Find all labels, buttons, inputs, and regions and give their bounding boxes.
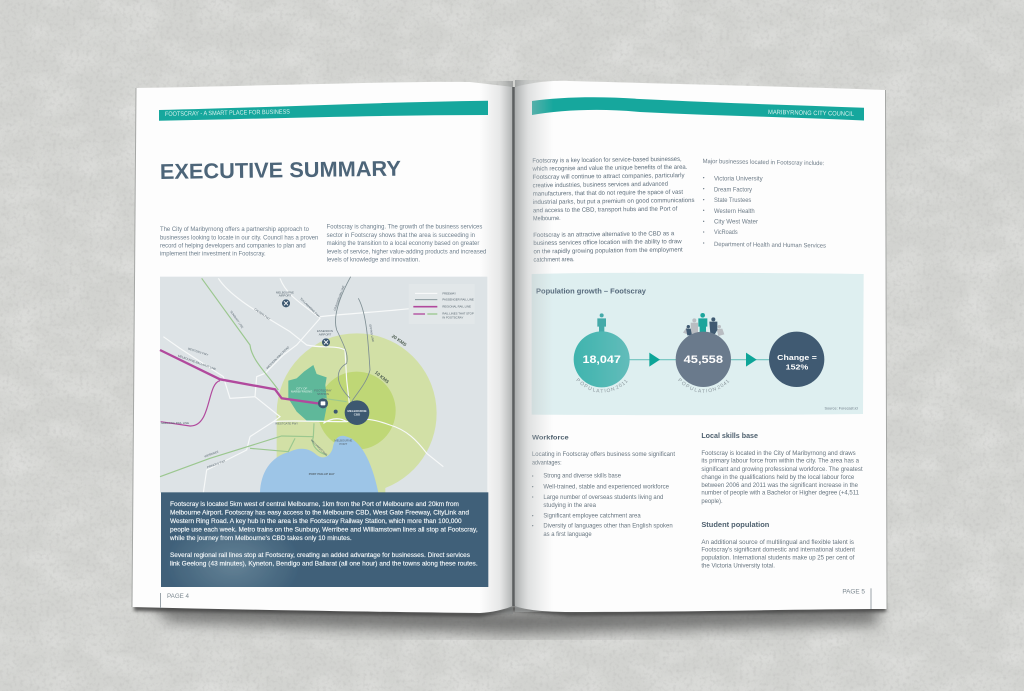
map: place labels: ESSENDON [317,329,333,333]
source note: Source: Forecast.id [824,407,858,411]
circle: population 2011 [574,331,630,387]
map: Footscray location [160,277,487,493]
panel: right page [515,80,887,612]
circle: population 2041: 45,558 [684,354,723,366]
major businesses list: Major businesses located in Footscray include: [703,158,825,167]
map: legend: IN FOOTSCRAY [442,315,463,319]
panel: population growth infographic [532,273,864,415]
label: population 2011: N [610,386,616,393]
intro text columns: implement their investment in Footscray. [160,251,266,258]
workforce section: Significant employee catchment area [543,513,641,520]
label: population 2041: 0 [720,382,725,389]
major businesses list: State Trustees [714,197,751,204]
intro text column: industrial parks, but put a premium on good communications [533,197,695,206]
label: population 2011: O [606,388,611,394]
callout: Footscray location text box: people use each week. Metro trains on the Sunbury, Werribee and Williamstown lines all stop at Footscray, [170,526,478,533]
student population section: population. International students make up 25 per cent of [701,554,855,561]
local skills base section: Footscray is located in the City of Maribyrnong and draws [701,450,856,457]
left header band: FOOTSCRAY - A SMART PLACE FOR BUSINESS [165,109,290,118]
intro text column: manufacturers, that that do not require the space of vast [533,189,683,198]
workforce section: Large number of overseas students living and [543,494,664,501]
intro text column: and access to the CBD, transport hubs and the Port of [533,206,678,214]
local skills base section [701,433,863,505]
callout: Footscray location text box: link Geelong (43 minutes), Kyneton, Bendigo and Ballarat (all one hour) and the towns along these routes. [170,560,478,567]
map: green lines [160,278,347,477]
local skills base section: Local skills base [701,433,758,440]
intro text column: business services office location with the ability to draw [533,238,682,247]
panel: left page [132,81,513,614]
workforce section: studying in the area [543,502,597,509]
label: population 2011: 0 [618,382,624,389]
student population section: the Victoria University total. [701,562,775,569]
page shadows [134,604,886,634]
major businesses list: Victoria University [714,175,764,182]
label: population 2041: P [684,383,691,390]
student population section: Student population [701,522,769,529]
map: 20km radius [277,333,437,493]
intro text columns: Footscray is changing. The growth of the business services [327,224,482,231]
map: Melbourne CBD marker: CBD [354,413,361,417]
left header band [159,101,488,121]
major businesses list: City West Water [714,219,758,226]
student population section [701,522,855,569]
label: population 2011: O [578,380,585,388]
label: population 2041: N [712,386,718,393]
workforce section: Locating in Footscray offers business some significant [532,451,675,458]
map: radius labels [374,334,408,385]
map: legend: FREEWAY [442,291,456,295]
label: population 2041: O [708,388,713,394]
label: population 2011 [575,377,630,395]
intro text column: catchment area. [533,256,575,264]
callout: Footscray location text box: Several regional rail lines stop at Footscray, creating an added advantage for businesses. Direct services [170,552,471,559]
page number: page 5 [842,588,871,609]
intro text columns: making the transition to a local economy based on greater [327,240,479,247]
map: place labels: CALDER FWY [253,307,271,321]
student population section: An additional source of multilingual and flexible talent is [701,539,854,546]
spine: dark gutter between pages [512,87,515,606]
map: radius labels: 20 KMS [391,334,408,347]
local skills base section: its primary labour force from within the city. The area has a [701,458,860,465]
label: population 2041: U [689,386,694,393]
right header band: MARIBYRNONG CITY COUNCIL [768,109,855,118]
callout: Footscray location text box: Western Ring Road. A key hub in the area is the Footscray Railway Station, which more than 100,000 [170,518,462,525]
map: Melbourne CBD marker: MELBOURNE [347,409,367,413]
label: population 2011: 1 [621,381,627,387]
callout: Footscray location text box: while the journey from Melbourne's CBD takes only 10 minutes. [169,535,352,542]
map: place labels: MARIBYRNONG [291,390,312,394]
icon: single person [597,313,606,333]
map: legend: REGIONAL RAIL LINE [442,305,471,309]
map: place labels: TULLAMARINE FWY [299,297,321,319]
label: population 2011: A [596,388,600,394]
map: City of Maribyrnong area [288,365,327,421]
connector lines and arrows [628,353,770,367]
map: place labels: STATION [317,392,329,396]
intro text column: Footscray will continue to attract companies, particularly [532,172,685,181]
icon: group of people [683,313,724,336]
map: Footscray station icon [318,398,328,408]
workforce section: Strong and diverse skills base [543,473,622,480]
major businesses list [703,158,826,250]
circle: change: Change = [777,353,817,362]
callout: Footscray location text box [161,492,488,587]
intro text column: which recognise and value the unique benefits of the area. [531,164,688,173]
intro text columns: record of helping developers and companies to plan and [160,242,306,249]
label: population 2041: T [702,389,705,395]
workforce section: Workforce [532,435,569,442]
map: place labels: MELBOURNE [334,439,352,443]
callout: Footscray location text box: Footscray is located 5km west of central Melbourne, 1km from the Port of Melbourne and 20km from [170,501,459,508]
local skills base section: change in the qualifications held by the local labour force [701,474,855,481]
student population section: Footscray's significant domestic and international student [701,547,855,554]
local skills base section: number of people with a Bachelor or Higher degree (+4,511 [701,490,860,497]
intro text columns: The City of Maribyrnong offers a partnership approach to [160,226,310,233]
page number: page 5: PAGE 5 [842,588,865,595]
map: place labels: FOOTSCRAY [314,389,332,393]
intro text column [531,156,695,264]
intro text columns: levels of knowledge and innovation. [327,257,420,264]
label: population 2041: 4 [722,381,728,387]
map: place labels: MELBOURNE [276,290,294,294]
label: population 2011: L [592,387,596,394]
map: place labels: PORT [339,442,348,446]
map: place labels: AIRPORT [279,294,292,298]
intro text column: Footscray is an attractive alternative to the CBD as a [533,230,675,239]
intro text column: Footscray is a key location for service-based businesses, [532,156,682,165]
workforce section [532,435,675,538]
map: place labels: AIRPORT [319,332,332,336]
label: population 2041: P [676,377,683,385]
label: population 2011: U [587,386,593,393]
map: place labels: CITY OF [296,386,307,390]
major businesses list: VicRoads [714,229,738,236]
circle: change [769,332,824,387]
intro text columns: businesses looking to locate in our city. Council has a proven [160,234,319,241]
label: population 2041: O [680,380,687,388]
label: population 2011: 2 [615,384,620,391]
workforce section: as a first language [543,531,592,538]
label: population 2041: L [694,387,698,394]
map: Port Phillip Bay [260,436,378,493]
map: place labels: WESTERN FWY [187,347,209,357]
map: airport icons [282,299,338,414]
title: EXECUTIVE SUMMARY [160,157,401,184]
label: population 2011: 1 [623,378,630,385]
map: place labels: GEELONG RAIL LINE [161,421,189,425]
label: population 2041 [676,377,731,395]
map: legend: PASSENGER RAIL LINE [442,298,474,302]
intro text column: Melbourne. [533,215,561,222]
label: population 2011: P [583,383,589,390]
map: place labels: PORT PHILLIP BAY [309,472,335,476]
intro text columns [160,224,487,264]
workforce section: advantages: [532,459,562,466]
map: place labels: MELBOURNE-BALLARAT LINE [177,354,217,371]
map: freeways [163,278,443,493]
map: place labels: WILLIAMSTOWN [310,438,328,457]
map: place labels: WERRIBEE [204,450,219,459]
map: place labels: SUNBURY LINE [229,310,244,329]
map: suburban rail lines [335,277,370,402]
page number: page 4 [160,593,189,608]
page number: page 4: PAGE 4 [167,593,189,600]
map: regional rail lines [160,350,320,426]
map: place labels: WESTGATE FWY [275,421,298,425]
local skills base section: people). [701,498,723,505]
major businesses list: Dream Factory [714,186,753,193]
map: 10km radius [318,372,396,450]
label: population 2041: 2 [717,384,722,391]
label: population 2041: A [698,388,702,394]
right header band [532,97,864,120]
label: population 2011: P [575,377,582,385]
label: population 2011: T [600,389,604,395]
map: place labels [161,285,375,476]
intro text columns: sector in Footscray shows that the area is succeeding in [327,232,476,239]
map: place labels: EPPING LINE [368,324,375,342]
label: population 2041: 1 [725,378,731,385]
intro text columns: levels of service, higher value-adding products and increased [327,248,487,255]
label: population 2041: I [706,388,708,394]
map: Melbourne CBD marker [345,400,369,425]
chart heading: Population growth – Footscray [536,288,646,295]
workforce section: Well-trained, stable and experienced workforce [543,483,670,490]
label: population 2011: I [604,388,606,394]
local skills base section: significant and growing professional workforce. The greatest [701,466,863,473]
map: legend [409,284,475,324]
major businesses list: Western Health [714,208,755,215]
callout: Footscray location text box: Melbourne Airport. Footscray has easy access to the Melbourne CBD, West Gate Freeway, CityLink and [170,510,469,517]
lower text columns [532,433,871,609]
circle: population 2011: 18,047 [582,354,621,366]
local skills base section: between 2006 and 2011 was the significant increase in the [701,482,859,489]
major businesses list: Department of Health and Human Services [714,241,826,250]
workforce section: Diversity of languages other than English spoken [543,523,673,530]
circle: population 2041 [676,332,731,387]
map: place labels: CRAIGIEBURN LINE [333,285,346,311]
intro text column: on the rapidly growing population from the employment [533,246,683,255]
circle: change: 152% [786,362,809,371]
intro text column: creative industries, business services and advanced [533,181,669,189]
map: place labels: WESTERN RING ROAD [265,345,290,370]
map: legend: RAIL LINES THAT STOP [442,312,474,316]
map: radius labels: 10 KMS [374,370,390,385]
map: place labels: PRINCES FWY [206,459,226,469]
